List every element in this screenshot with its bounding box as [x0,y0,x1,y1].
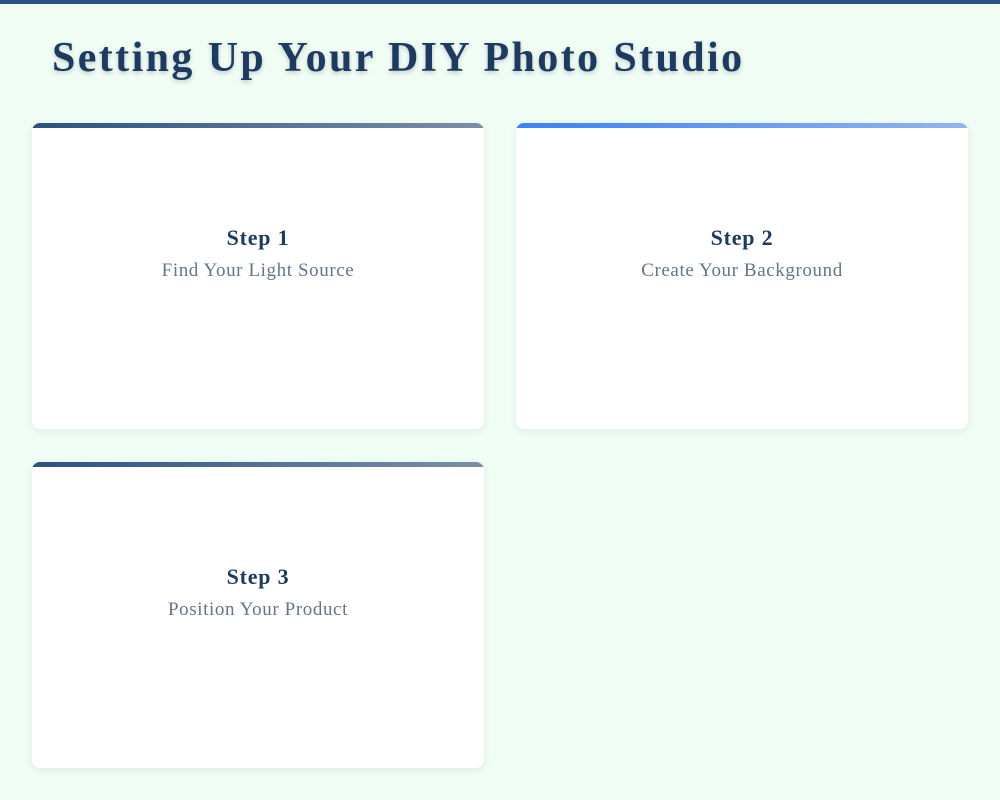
step 3 heading: Step 3 [227,564,289,589]
panel: step 2 [516,123,968,429]
step 2 text: Create Your Background [641,260,843,281]
step 1 text: Find Your Light Source [162,260,354,281]
panel: step 3 [32,462,484,768]
panel: step 1 [32,123,484,429]
step 1 heading: Step 1 [227,225,289,250]
step 2 heading: Step 2 [711,225,773,250]
step 3 text: Position Your Product [168,599,348,620]
title: Setting Up Your DIY Photo Studio [52,35,745,81]
